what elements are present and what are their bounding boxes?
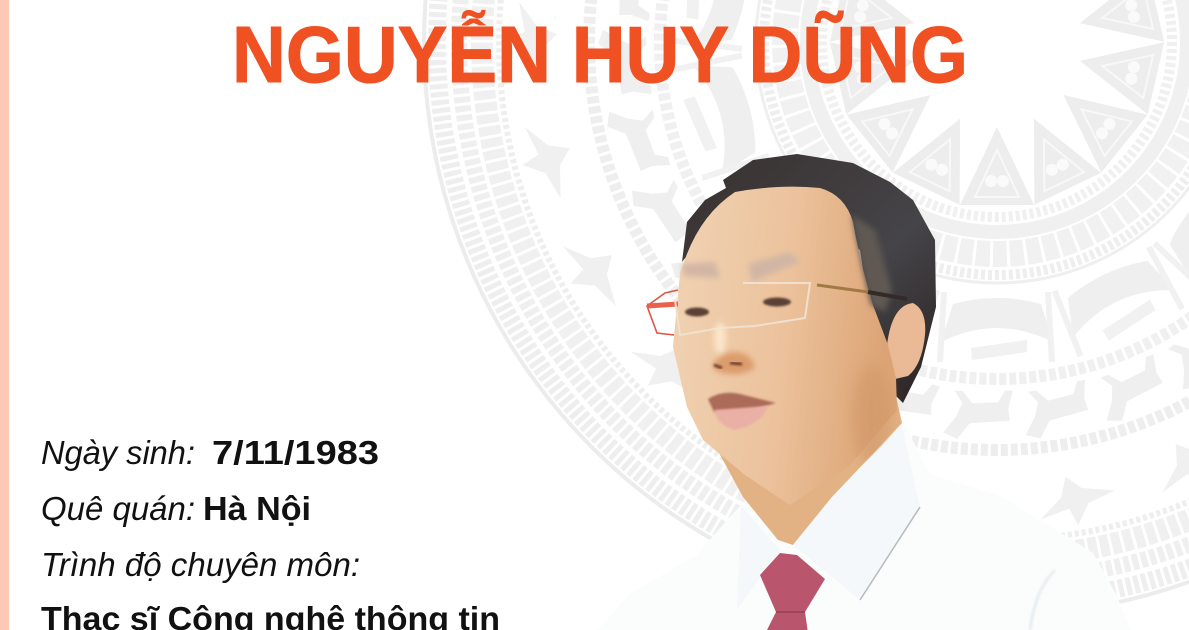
cheek shading <box>852 365 892 465</box>
sleeve fold <box>1030 570 1055 630</box>
hometown: Hà Nội <box>203 490 311 527</box>
nose <box>712 352 755 374</box>
nose highlight <box>714 322 726 354</box>
left accent bar <box>0 0 9 630</box>
hometown: Quê quán: <box>41 490 195 527</box>
eyes <box>685 298 791 316</box>
birth date: 7/11/1983 <box>212 434 379 471</box>
hometown <box>41 490 311 527</box>
neck <box>712 370 902 545</box>
collar <box>737 425 920 610</box>
mouth <box>708 393 776 430</box>
brows <box>682 252 800 282</box>
bronze drum watermark <box>424 0 1189 615</box>
portrait <box>588 154 1135 630</box>
glasses <box>647 283 907 335</box>
title: NGUYỄN HUY DŨNG <box>232 10 968 99</box>
face <box>673 187 897 505</box>
tie <box>760 553 825 630</box>
shirt <box>588 419 1135 630</box>
temple hair shading <box>852 215 892 312</box>
hair <box>682 154 936 403</box>
birth date <box>41 434 379 471</box>
birth date: Ngày sinh: <box>41 434 195 471</box>
ear <box>887 303 925 379</box>
qualification label: Trình độ chuyên môn: <box>41 546 360 583</box>
